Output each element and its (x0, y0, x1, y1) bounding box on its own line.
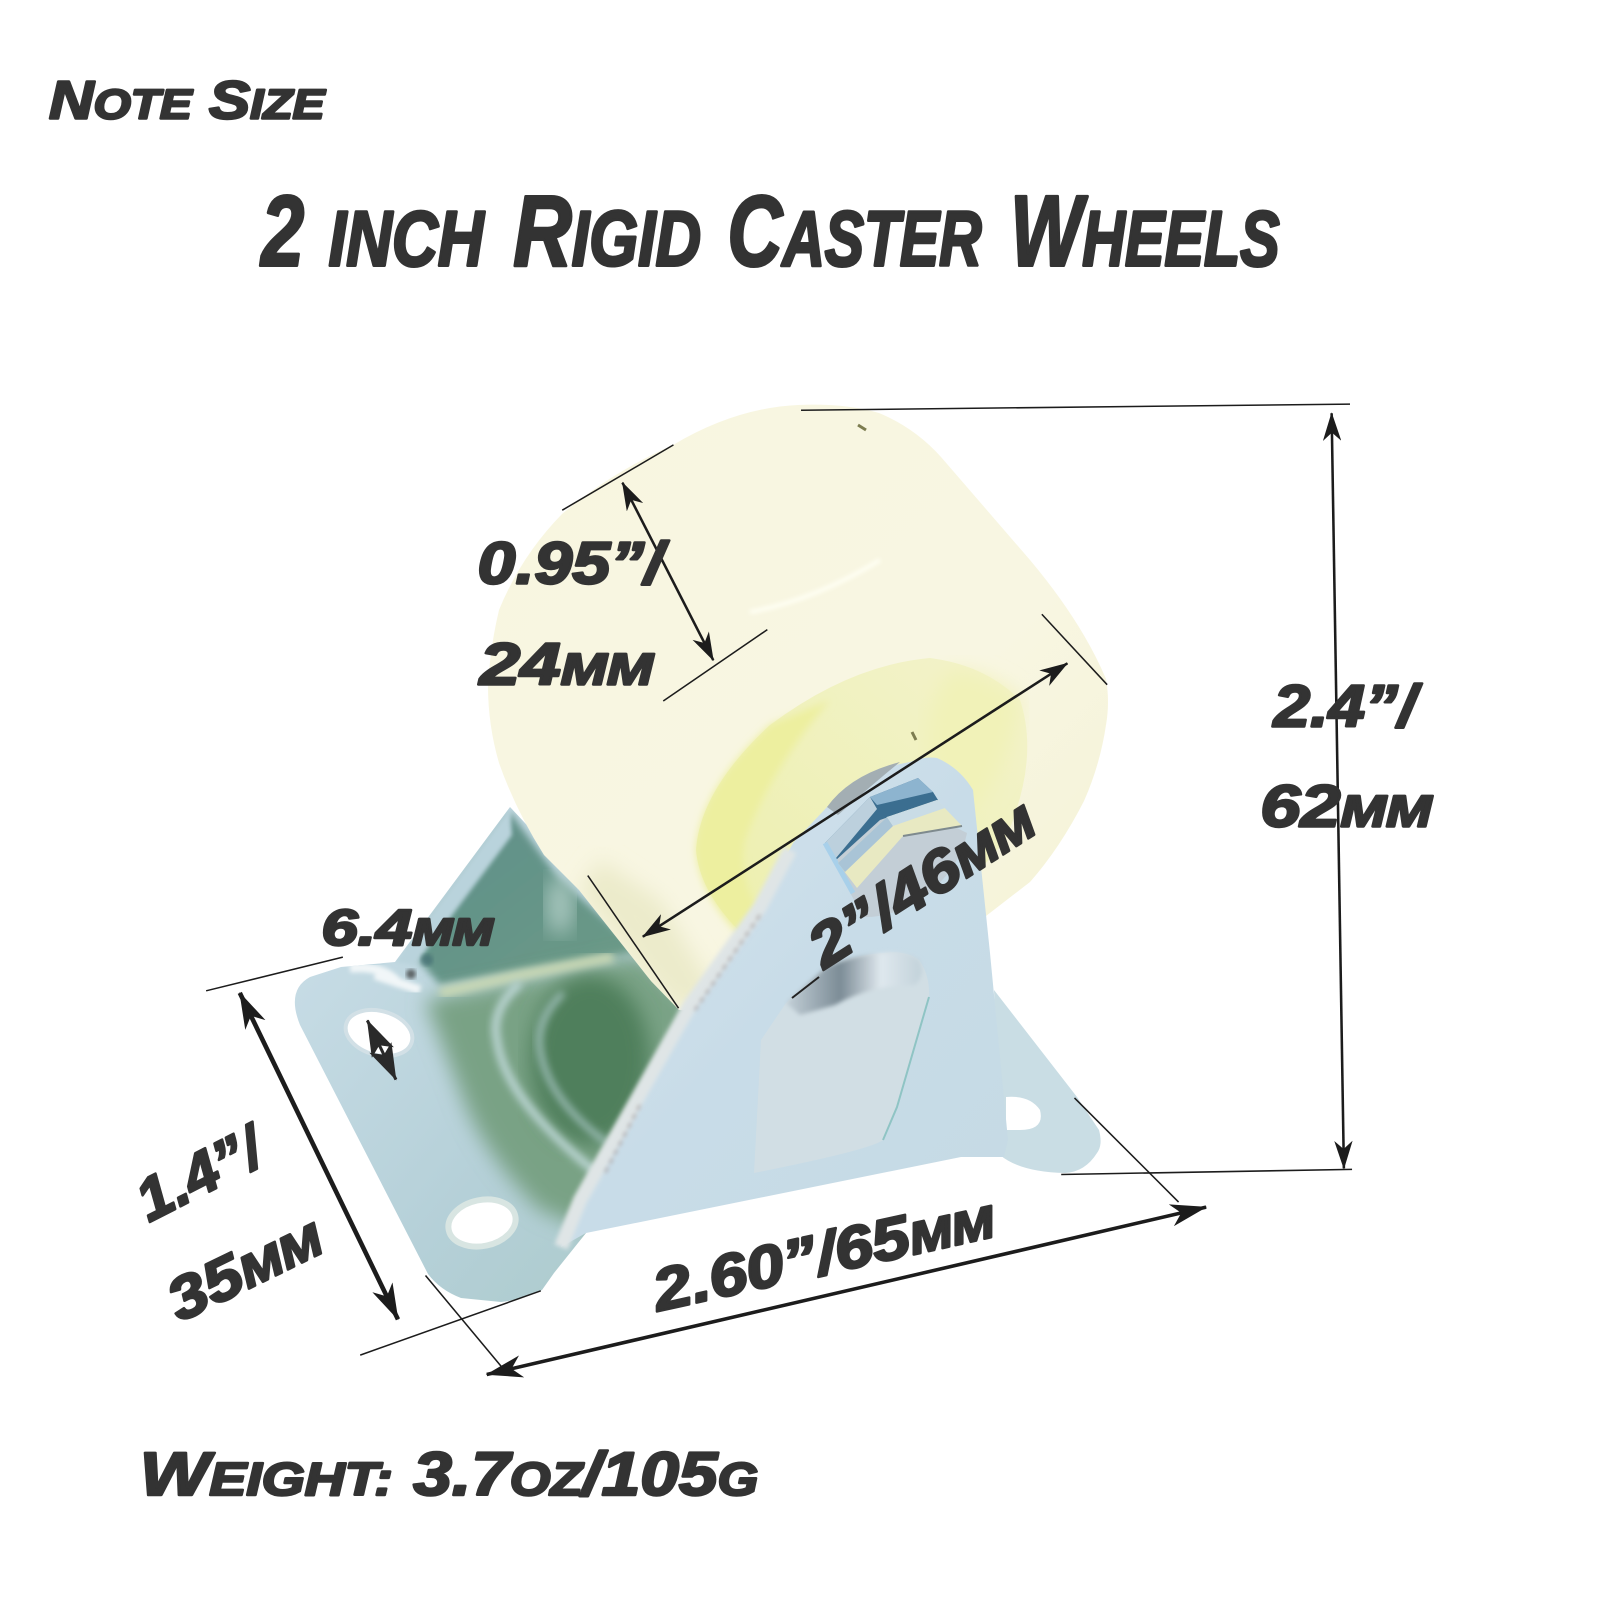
label: tread width mm: 24 MM (478, 631, 655, 698)
label: wheel diameter: 2”/46MM (794, 785, 1048, 981)
label: plate width inches: 1.4”/ (124, 1112, 278, 1234)
title: RIGID (513, 175, 701, 287)
label: plate width mm: 35MM (156, 1202, 334, 1334)
back bracket interior (410, 812, 640, 985)
title (260, 175, 1280, 287)
dimension: wheel diameter 2" (588, 614, 1107, 1008)
dimension: total height 2.4" (801, 404, 1352, 1174)
bolt hex head (838, 800, 962, 888)
title: WHEELS (1010, 175, 1280, 287)
mounting hole: bottom (444, 1193, 520, 1253)
bolt washer (830, 800, 967, 917)
right base ear (994, 990, 1101, 1173)
product photo: caster wheel (295, 405, 1108, 1302)
label: tread width inches: 0.95”/ (478, 530, 670, 597)
wheel hub (696, 658, 1027, 950)
label: height inches: 2.4”/ (1272, 673, 1423, 740)
embossed ring (496, 983, 597, 1173)
label: hole size: 6.4 MM (321, 899, 495, 956)
dimension: hole size 6.4mm (367, 1020, 396, 1080)
title: 2 (260, 175, 304, 287)
label: height mm: 62 MM (1260, 773, 1434, 840)
mounting hole: top left (340, 1003, 418, 1063)
front bracket plate (561, 758, 1008, 1247)
label: weight (140, 1440, 758, 1508)
label: weight: W EIGHT: (140, 1440, 393, 1508)
dimension: plate length 2.60" (426, 1098, 1206, 1374)
dimension: tread width 0.95" (562, 445, 767, 701)
label: weight: 3.7 OZ/105 G (413, 1440, 758, 1508)
title: CASTER (728, 175, 982, 287)
plate dimple (754, 952, 929, 1173)
base plate and back bracket (295, 807, 700, 1302)
label: plate length: 2.60”/65 MM (645, 1183, 1002, 1324)
wheel tread and side (488, 405, 1108, 1020)
dimension: plate width 1.4" (206, 957, 541, 1355)
title: INCH (329, 196, 485, 282)
heading: note size: NOTE SIZE (49, 70, 326, 130)
bolt slot and shaft (825, 778, 938, 893)
plate recess (425, 955, 700, 1230)
